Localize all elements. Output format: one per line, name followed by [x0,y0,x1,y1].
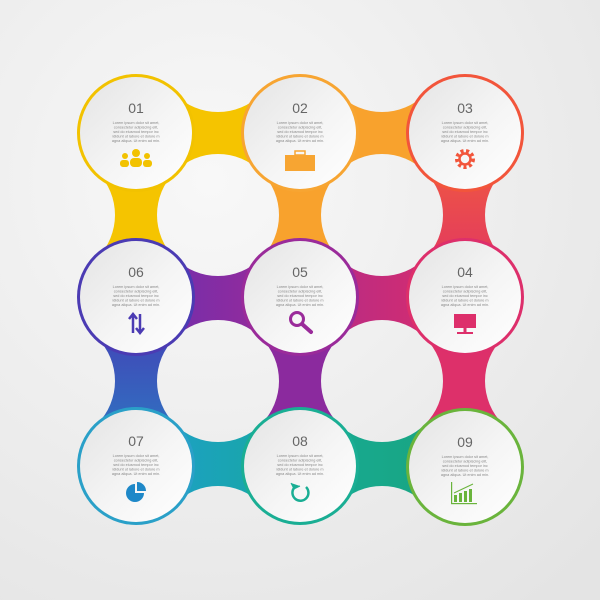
circle 09: 09 [457,434,473,450]
circle 02: ididunt ut labore et dolore m [276,134,324,138]
circle 03: agna aliqua. Ut enim ad min. [441,139,489,143]
icon: magnifier [290,312,311,332]
circle 05: consectetur adipiscing elit, [278,290,322,294]
circle 06: ididunt ut labore et dolore m [112,298,160,302]
circle 04: Lorem ipsum dolor sit amet, [442,285,488,289]
circle 07: agna aliqua. Ut enim ad min. [112,472,160,476]
circle 06: 06 [128,264,144,280]
circle 09: Lorem ipsum dolor sit amet, [442,455,488,459]
circle 08: ididunt ut labore et dolore m [276,468,324,472]
circle 05: ididunt ut labore et dolore m [276,298,324,302]
icon: briefcase [285,151,315,171]
circle 05: 05 [292,264,308,280]
icon: pie chart [126,482,146,502]
circle 03: 03 [457,100,473,116]
connectors [102,102,498,494]
circle 09: agna aliqua. Ut enim ad min. [441,473,489,477]
circle 07 [77,407,195,525]
circle 02: sed do eiusmod tempor inc [277,130,323,134]
icon: gear [457,151,473,167]
icon: monitor [454,314,476,334]
circle 03: sed do eiusmod tempor inc [442,130,488,134]
circle 04: ididunt ut labore et dolore m [441,298,489,302]
icon: team [120,149,152,167]
circle 04: 04 [457,264,473,280]
circle 08: Lorem ipsum dolor sit amet, [277,454,323,458]
circle 08: agna aliqua. Ut enim ad min. [276,472,324,476]
circle 01 [77,74,195,192]
circle 07: ididunt ut labore et dolore m [112,468,160,472]
circle 02 [241,74,359,192]
circle 06: Lorem ipsum dolor sit amet, [113,285,159,289]
circle 07: consectetur adipiscing elit, [114,458,158,462]
circle 03: consectetur adipiscing elit, [443,126,487,130]
circle 01: sed do eiusmod tempor inc [113,130,159,134]
circle 04: consectetur adipiscing elit, [443,290,487,294]
circle 09: consectetur adipiscing elit, [443,460,487,464]
circle 05: Lorem ipsum dolor sit amet, [277,285,323,289]
circle 06: sed do eiusmod tempor inc [113,294,159,298]
circle 09: ididunt ut labore et dolore m [441,468,489,472]
circle 06 [77,238,195,356]
circle 02: 02 [292,100,308,116]
circle 05: sed do eiusmod tempor inc [277,294,323,298]
circle 09: sed do eiusmod tempor inc [442,464,488,468]
circle 03: Lorem ipsum dolor sit amet, [442,121,488,125]
circle 05: agna aliqua. Ut enim ad min. [276,303,324,307]
circle 03 [406,74,524,192]
circle 01: agna aliqua. Ut enim ad min. [112,139,160,143]
circle 01: consectetur adipiscing elit, [114,126,158,130]
circle 09 [406,408,524,526]
icon: arrows up down [129,314,144,333]
circle 05 [241,238,359,356]
circle 01: 01 [128,100,144,116]
circle 08 [241,407,359,525]
icon: refresh [291,483,308,501]
circle 02: Lorem ipsum dolor sit amet, [277,121,323,125]
circle 08: sed do eiusmod tempor inc [277,463,323,467]
circle 06: agna aliqua. Ut enim ad min. [112,303,160,307]
circle 08: consectetur adipiscing elit, [278,458,322,462]
circle 07: sed do eiusmod tempor inc [113,463,159,467]
circle 04: sed do eiusmod tempor inc [442,294,488,298]
circle 02: agna aliqua. Ut enim ad min. [276,139,324,143]
circle 02: consectetur adipiscing elit, [278,126,322,130]
circle 03: ididunt ut labore et dolore m [441,134,489,138]
circle 01: ididunt ut labore et dolore m [112,134,160,138]
circle 08: 08 [292,433,308,449]
circle 01: Lorem ipsum dolor sit amet, [113,121,159,125]
circle 07: Lorem ipsum dolor sit amet, [113,454,159,458]
icon: bar chart [451,482,477,504]
circle 07: 07 [128,433,144,449]
circle 06: consectetur adipiscing elit, [114,290,158,294]
circle 04 [406,238,524,356]
circle 04: agna aliqua. Ut enim ad min. [441,303,489,307]
